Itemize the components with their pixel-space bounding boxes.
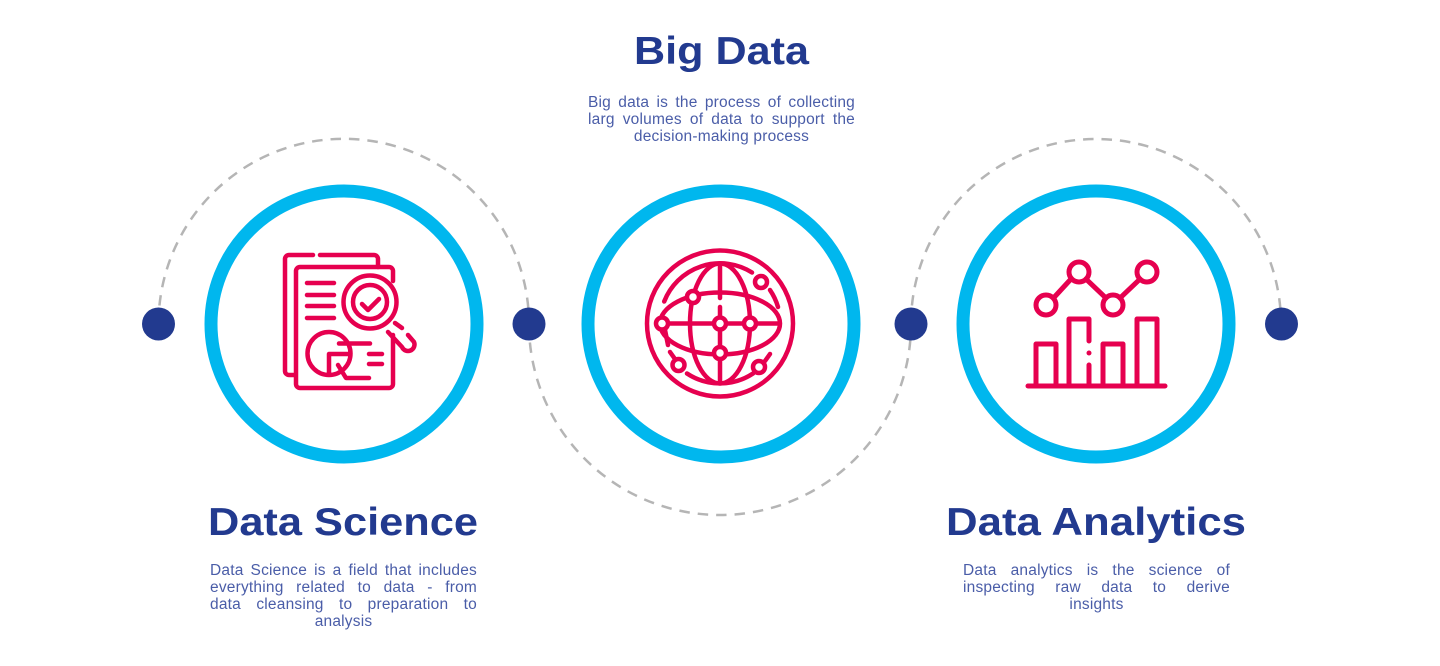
text block: Big Data description <box>588 94 855 145</box>
ring: data science <box>211 191 477 457</box>
node dot 4 <box>1265 308 1298 340</box>
text block: Data Analytics description: inspecting raw data to derive <box>963 579 1230 596</box>
text block: Data Science description: analysis <box>315 613 372 630</box>
text block: Data Science description <box>210 562 477 630</box>
node dot 3 <box>894 308 928 340</box>
text block: Big Data description: decision-making process <box>634 128 809 145</box>
text block: Data Analytics description <box>963 562 1230 613</box>
text block: Data Science description: Data Science is a field that includes <box>210 562 477 579</box>
dashed arc: right <box>911 139 1281 324</box>
icon: globe network <box>647 250 793 396</box>
icon: document with magnifier <box>285 255 414 388</box>
dashed arc: middle <box>529 324 911 515</box>
title: Data Analytics: Data Analytics <box>946 501 1246 544</box>
text block: Big Data description: Big data is the process of collecting <box>588 94 855 111</box>
ring: data analytics <box>963 191 1229 457</box>
text block: Data Analytics description: Data analytics is the science of <box>963 562 1230 579</box>
node dot 2 <box>512 308 546 340</box>
ring: big data <box>588 191 854 457</box>
title: Data Science: Data Science <box>208 501 478 544</box>
text block: Data Science description: everything related to data - from <box>210 579 477 596</box>
dashed arc: left <box>158 139 529 324</box>
icon: bar and line chart <box>1028 262 1165 386</box>
node dot 1 <box>142 308 175 340</box>
text block: Data Science description: data cleansing to preparation to <box>210 596 477 613</box>
title: Big Data: Big Data <box>634 30 809 73</box>
text block: Data Analytics description: insights <box>1069 596 1124 613</box>
text block: Big Data description: larg volumes of data to support the <box>588 111 855 128</box>
